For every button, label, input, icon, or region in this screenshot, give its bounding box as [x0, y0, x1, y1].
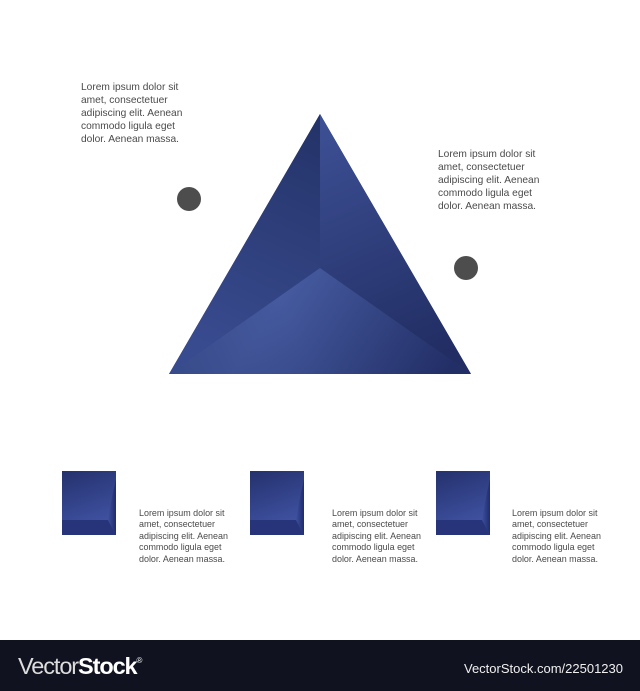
- text block: top left: adipiscing elit. Aenean: [81, 108, 182, 119]
- marker dot: right: [454, 256, 478, 280]
- right face: [320, 114, 471, 374]
- square icon 2: [250, 471, 304, 535]
- bottom face: [169, 268, 471, 374]
- marker dot: left: [177, 187, 201, 211]
- text block: top right: dolor. Aenean massa.: [438, 201, 536, 212]
- text block: bottom 1: adipiscing elit. Aenean: [139, 531, 228, 541]
- text block: top left: Lorem ipsum dolor sit: [81, 82, 178, 93]
- text block: bottom 1: dolor. Aenean massa.: [139, 554, 225, 564]
- text block: bottom 1: amet, consectetuer: [139, 519, 215, 529]
- text block: bottom 3: adipiscing elit. Aenean: [512, 531, 601, 541]
- text block: bottom 3: dolor. Aenean massa.: [512, 554, 598, 564]
- text block: bottom 1: Lorem ipsum dolor sit: [139, 508, 224, 518]
- footer id: VectorStock.com/22501230: [464, 661, 623, 676]
- bottom face left shading: [169, 268, 471, 374]
- text block: bottom 1: commodo ligula eget: [139, 542, 221, 552]
- text block: top right: commodo ligula eget: [438, 188, 532, 199]
- text block: bottom 2: amet, consectetuer: [332, 519, 408, 529]
- text block: top left: commodo ligula eget: [81, 121, 175, 132]
- text block: bottom 1: [139, 508, 228, 564]
- text block: bottom 2: Lorem ipsum dolor sit: [332, 508, 417, 518]
- triangle base: [169, 114, 471, 374]
- square icon 3: [436, 471, 490, 535]
- text block: bottom 2: dolor. Aenean massa.: [332, 554, 418, 564]
- text block: bottom 3: [512, 508, 601, 564]
- left face: [169, 114, 320, 374]
- footer bar: [0, 640, 640, 691]
- text block: top left: [81, 82, 182, 145]
- text block: bottom 2: commodo ligula eget: [332, 542, 414, 552]
- text block: top right: [438, 149, 539, 212]
- square icon 1: [62, 471, 116, 535]
- footer logo: VectorStock®: [18, 653, 142, 679]
- text block: bottom 3: commodo ligula eget: [512, 542, 594, 552]
- text block: top right: adipiscing elit. Aenean: [438, 175, 539, 186]
- text block: bottom 2: adipiscing elit. Aenean: [332, 531, 421, 541]
- text block: bottom 2: [332, 508, 421, 564]
- text block: top left: dolor. Aenean massa.: [81, 134, 179, 145]
- text block: top left: amet, consectetuer: [81, 95, 168, 106]
- text block: top right: amet, consectetuer: [438, 162, 525, 173]
- text block: bottom 3: Lorem ipsum dolor sit: [512, 508, 597, 518]
- text block: top right: Lorem ipsum dolor sit: [438, 149, 535, 160]
- text block: bottom 3: amet, consectetuer: [512, 519, 588, 529]
